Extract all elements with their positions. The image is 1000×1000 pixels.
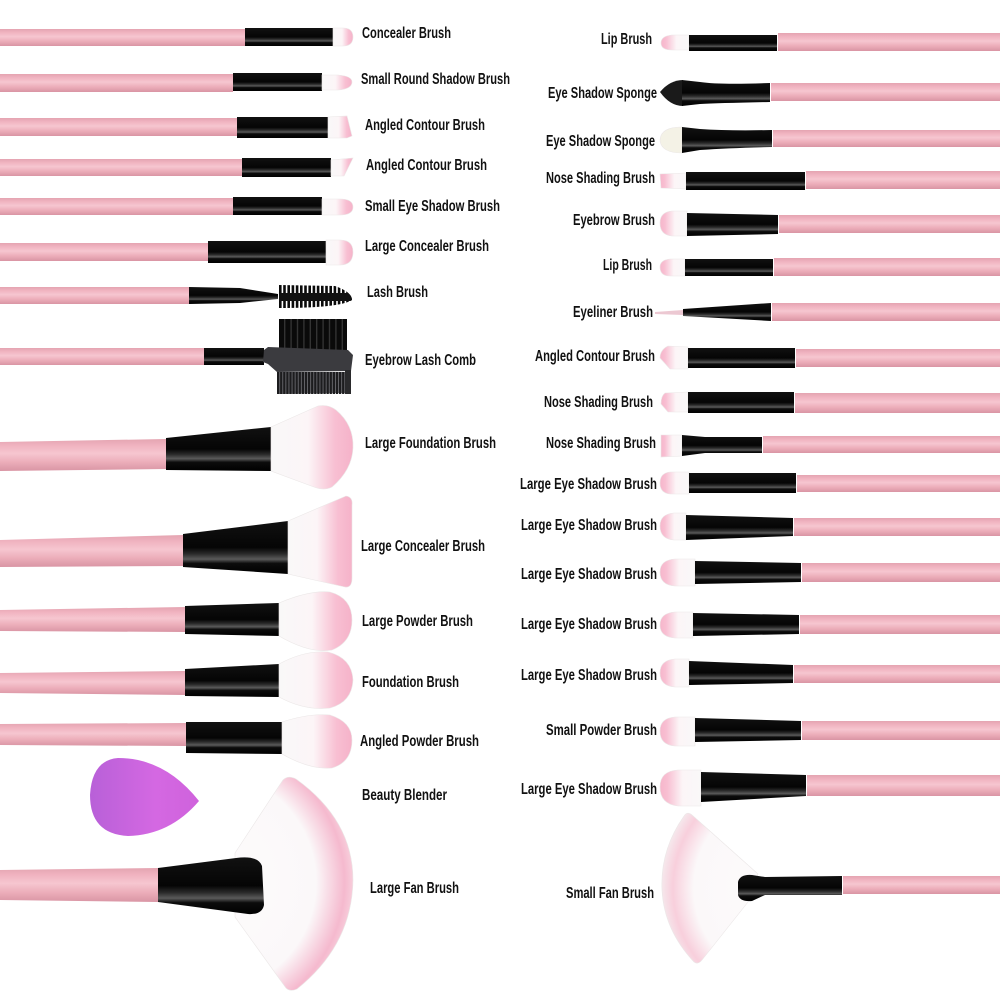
brush: large eye shadow 3 (660, 559, 1000, 586)
comb teeth (277, 370, 351, 394)
spiral (279, 285, 352, 309)
label: Concealer Brush (362, 25, 451, 42)
ferrule (185, 664, 279, 697)
handle (0, 29, 245, 46)
ferrule (166, 427, 271, 471)
ferrule (689, 35, 777, 51)
handle (794, 518, 1000, 536)
brush: large eye shadow 4 (660, 612, 1000, 638)
brush: large fan (0, 777, 353, 990)
label: Large Fan Brush (370, 880, 459, 897)
handle (0, 74, 233, 92)
handle (802, 721, 1000, 740)
brush: nose shading 3 (661, 435, 1000, 457)
bristles (661, 35, 689, 50)
label: Angled Contour Brush (535, 348, 655, 365)
label: Eye Shadow Sponge (546, 133, 655, 150)
brush: lash (0, 287, 352, 304)
handle (794, 665, 1000, 683)
bristles (282, 715, 352, 768)
bristles (660, 659, 689, 687)
handle (773, 130, 1000, 147)
sponge (660, 80, 683, 106)
label: Large Eye Shadow Brush (520, 476, 657, 493)
ferrule (685, 259, 773, 276)
handle (802, 563, 1000, 582)
ferrule (688, 348, 795, 368)
brush: small round shadow (0, 73, 352, 92)
bristles (660, 346, 688, 369)
icon: beauty blender sponge (90, 758, 199, 836)
handle (0, 287, 190, 304)
ferrule (242, 158, 331, 177)
handle (0, 243, 208, 261)
handle (800, 615, 1000, 634)
handle (806, 171, 1000, 189)
brush: large eye shadow 6 (660, 770, 1000, 806)
label: Nose Shading Brush (544, 394, 653, 411)
label: Eyeliner Brush (573, 304, 653, 321)
label: Angled Contour Brush (366, 157, 487, 174)
handle (0, 198, 233, 215)
brush: eyebrow (660, 211, 1000, 236)
ferrule (233, 73, 322, 91)
ferrule (686, 515, 793, 540)
label: Eye Shadow Sponge (548, 85, 657, 102)
brush: small powder (660, 717, 1000, 746)
bristles (662, 813, 758, 963)
brush: large eye shadow 2 (660, 513, 1000, 540)
bristles (660, 259, 685, 276)
brush: large eye shadow 1 (660, 472, 1000, 494)
label: Lash Brush (367, 284, 428, 301)
bristles (279, 592, 352, 651)
label: Angled Contour Brush (365, 117, 485, 134)
handle (771, 83, 1000, 101)
label: Eyebrow Lash Comb (365, 352, 476, 369)
brush: large concealer 2 (0, 496, 352, 587)
ferrule (189, 287, 278, 304)
label: Large Concealer Brush (361, 538, 485, 555)
handle (807, 775, 1000, 796)
label: Lip Brush (603, 257, 652, 274)
ferrule (686, 172, 805, 190)
label: Small Fan Brush (566, 885, 654, 902)
bristles (660, 770, 701, 806)
ferrule (185, 603, 279, 636)
ferrule (237, 117, 328, 138)
brush: nose shading 2 (661, 392, 1000, 413)
handle (778, 33, 1000, 51)
brush: foundation (0, 652, 353, 709)
label: Large Eye Shadow Brush (521, 517, 657, 534)
handle (0, 723, 186, 746)
brush: concealer (0, 28, 353, 46)
comb bristles (279, 319, 347, 352)
label: Angled Powder Brush (360, 733, 479, 750)
ferrule (689, 661, 793, 685)
label: Foundation Brush (362, 674, 459, 691)
brush: eyeliner (655, 303, 1000, 321)
handle (0, 439, 166, 471)
label: Large Powder Brush (362, 613, 473, 630)
ferrule (701, 772, 806, 802)
brush: lip 2 (660, 258, 1000, 276)
ferrule (688, 392, 794, 413)
ferrule (695, 561, 801, 584)
bristles (660, 472, 689, 494)
label: Small Powder Brush (546, 722, 657, 739)
ferrule (687, 213, 778, 236)
bristles (328, 116, 352, 138)
label: Large Eye Shadow Brush (521, 566, 657, 583)
bristles (661, 435, 682, 457)
label: Large Concealer Brush (365, 238, 489, 255)
ferrule (693, 613, 799, 636)
brush: angled contour 2 (0, 158, 353, 177)
bristles (660, 717, 695, 746)
sponge (660, 127, 682, 153)
bristles (326, 240, 353, 265)
ferrule (738, 875, 842, 901)
handle (795, 393, 1000, 413)
label: Small Round Shadow Brush (361, 71, 510, 88)
bristles (322, 199, 353, 215)
bristles (331, 158, 353, 176)
brush: nose shading (660, 171, 1000, 190)
brush: angled contour (0, 116, 352, 138)
ferrule (233, 197, 322, 215)
handle (797, 475, 1000, 492)
ferrule (683, 303, 771, 321)
label: Large Eye Shadow Brush (521, 781, 657, 798)
bristles (271, 406, 353, 489)
handle (0, 535, 183, 567)
handle (0, 159, 242, 176)
ferrule (204, 348, 264, 365)
ferrule (186, 722, 282, 754)
brush: small fan (662, 813, 1000, 963)
comb body (263, 347, 353, 372)
bristles (660, 559, 695, 586)
label: Nose Shading Brush (546, 170, 655, 187)
brush: lip (661, 33, 1000, 51)
handle (0, 868, 158, 902)
label: Nose Shading Brush (546, 435, 656, 452)
brush: small eye shadow (0, 197, 353, 215)
bristles (279, 652, 353, 709)
brush: white eye shadow sponge (660, 127, 1000, 153)
bristles (235, 777, 353, 990)
label: Small Eye Shadow Brush (365, 198, 500, 215)
label: Large Eye Shadow Brush (521, 616, 657, 633)
brush: angled contour (660, 346, 1000, 369)
bristles (333, 28, 353, 46)
brush: large powder (0, 592, 352, 651)
label: Eyebrow Brush (573, 212, 655, 229)
ferrule (245, 28, 333, 46)
label: Beauty Blender (362, 787, 447, 804)
handle (772, 303, 1000, 321)
bristles (655, 310, 683, 315)
ferrule (682, 435, 762, 456)
label: Large Eye Shadow Brush (521, 667, 657, 684)
bristles (660, 211, 687, 236)
ferrule (183, 521, 288, 574)
ferrule (158, 857, 264, 914)
ferrule (695, 718, 801, 742)
brush: large foundation (0, 406, 353, 489)
bristles (322, 75, 352, 90)
bristles (660, 612, 693, 638)
handle (796, 349, 1000, 367)
handle (779, 215, 1000, 233)
brush: eyebrow lash comb (0, 319, 353, 394)
label: Large Foundation Brush (365, 435, 496, 452)
ferrule (689, 473, 796, 493)
bristles (660, 173, 686, 189)
handle (763, 436, 1000, 453)
handle (0, 348, 204, 365)
bristles (660, 513, 686, 540)
label: Lip Brush (601, 31, 652, 48)
handle (0, 118, 237, 136)
ferrule (682, 127, 772, 153)
ferrule (682, 80, 770, 106)
brush: black eye shadow sponge (660, 80, 1000, 106)
ferrule (208, 241, 326, 263)
handle (0, 671, 185, 695)
brush: angled powder (0, 715, 352, 768)
handle (0, 607, 185, 632)
handle (843, 876, 1000, 894)
bristles (661, 392, 688, 412)
handle (774, 258, 1000, 276)
brush: large eye shadow 5 (660, 659, 1000, 687)
brush: large concealer (0, 240, 353, 265)
bristles (288, 496, 352, 587)
